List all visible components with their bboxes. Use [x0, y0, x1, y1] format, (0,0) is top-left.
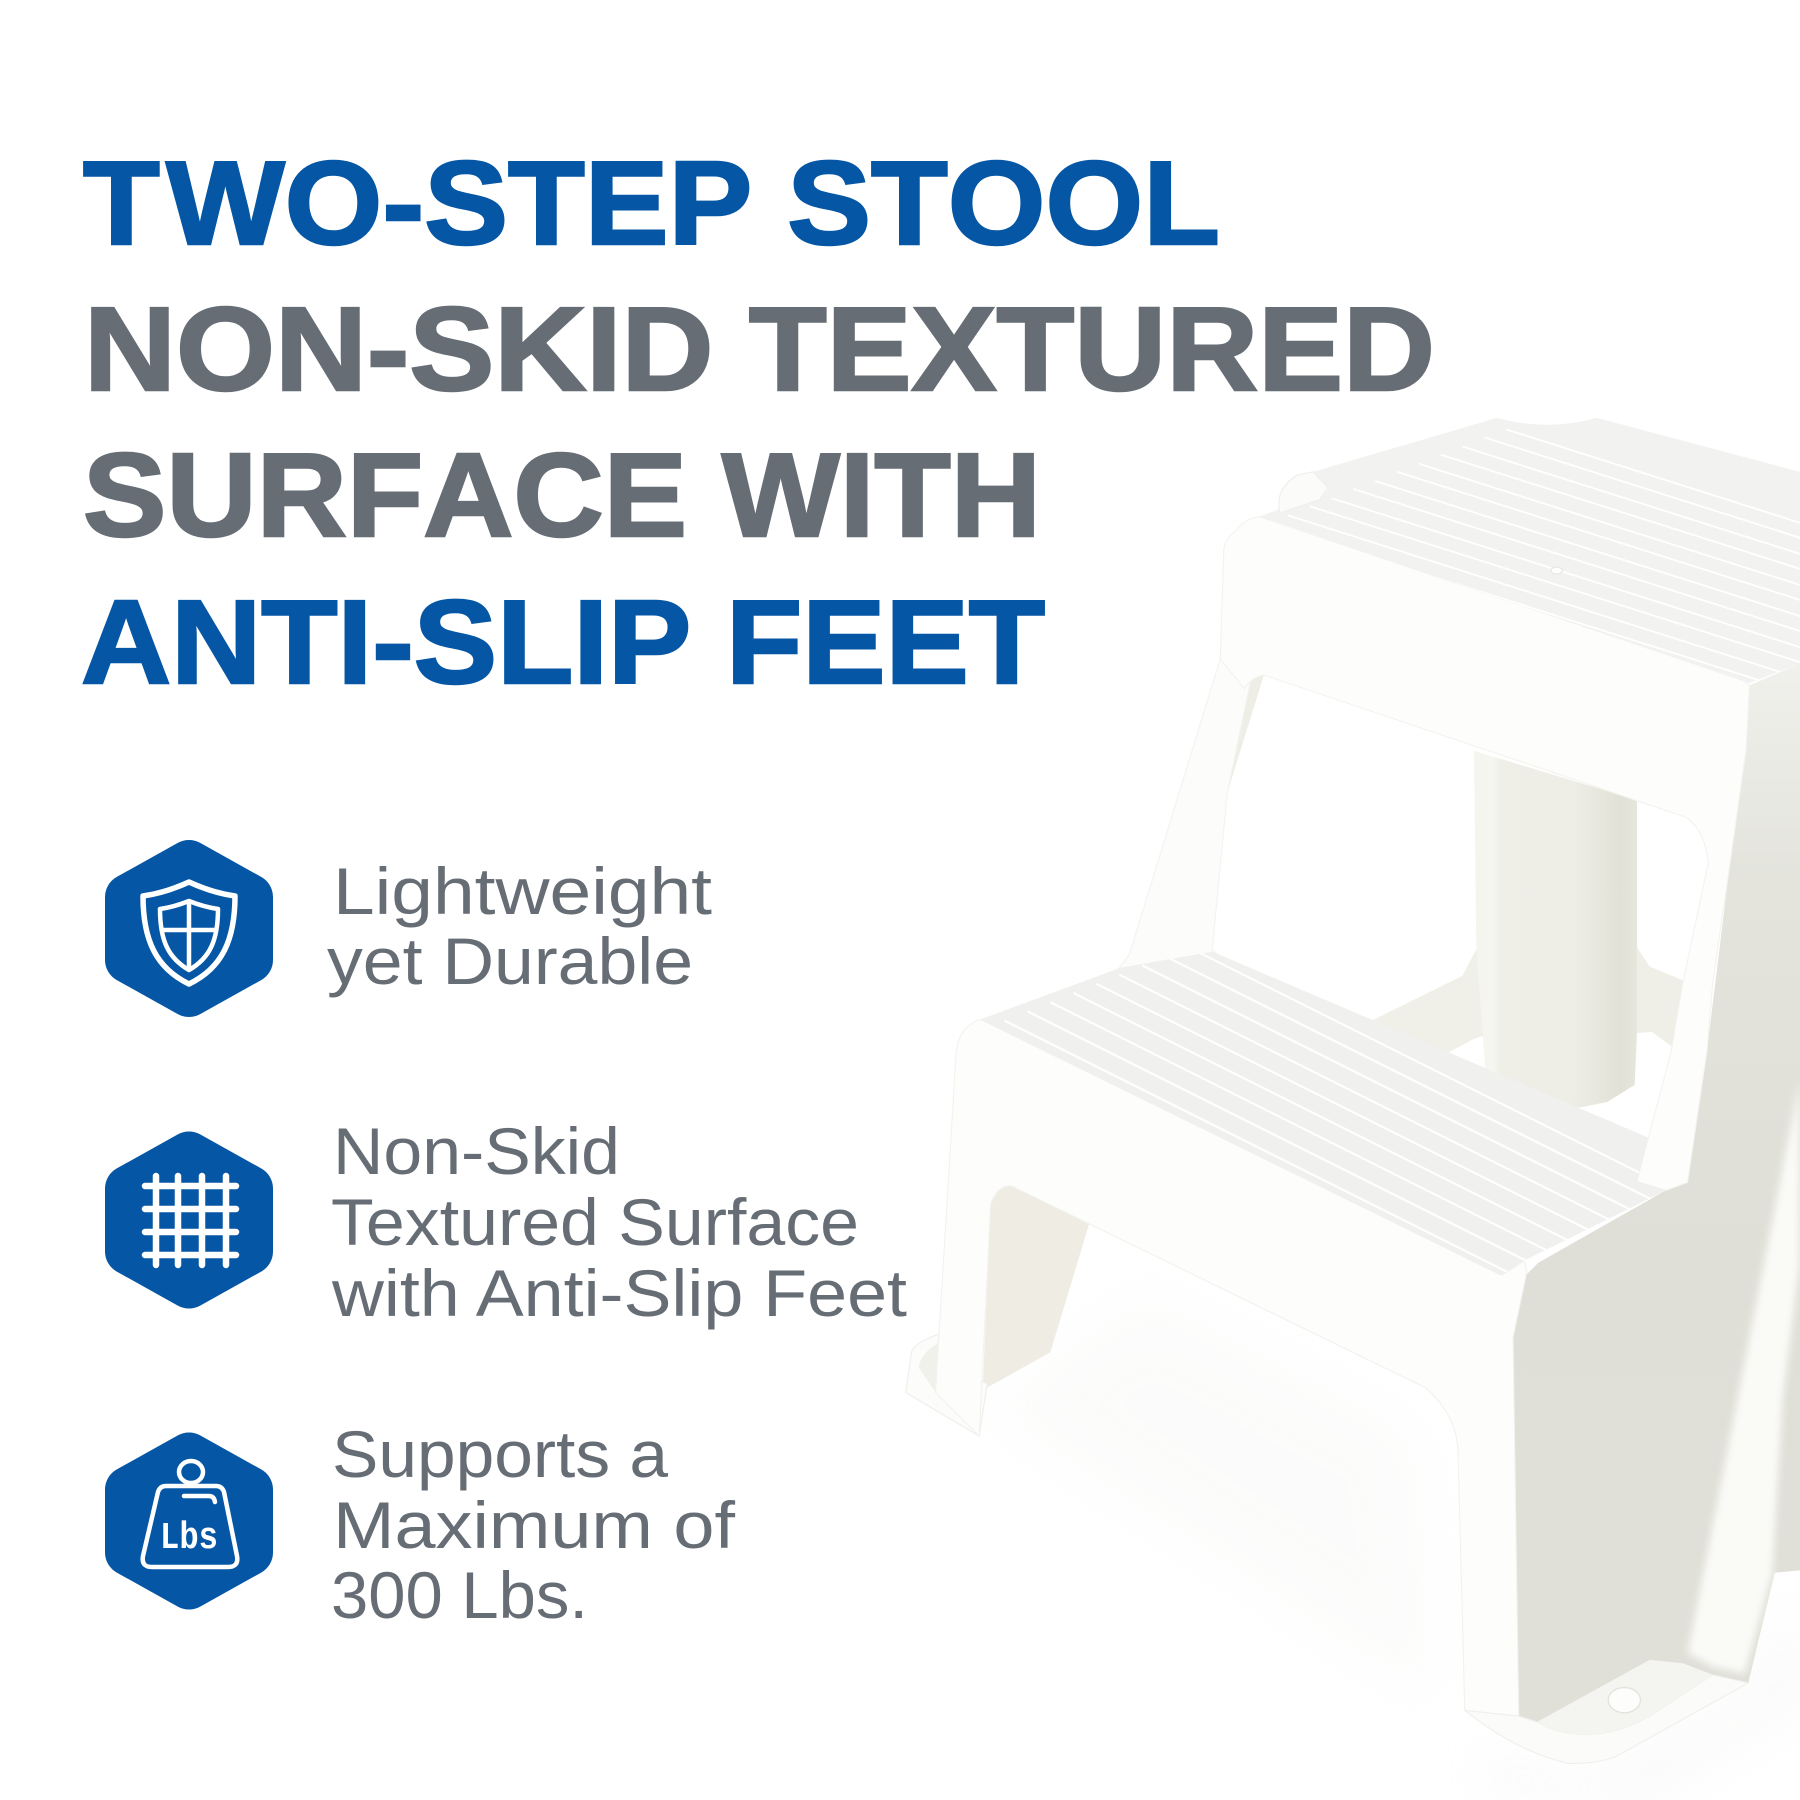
text: supports maximum 300 lbs: 300 Lbs.	[331, 1558, 588, 1632]
right foot tray	[1537, 1660, 1713, 1735]
upper tread bump	[1279, 472, 1328, 513]
foot peg	[1608, 1688, 1640, 1713]
title	[81, 137, 1435, 709]
text: non-skid textured surface: with Anti-Slip Feet	[331, 1256, 907, 1330]
inner arm sliver	[1227, 675, 1264, 793]
lower tread surface	[980, 952, 1666, 1275]
icon: textured grid badge	[128, 1154, 250, 1286]
text: supports maximum 300 lbs: Supports a	[332, 1417, 668, 1491]
text: non-skid textured surface: Textured Surface	[331, 1185, 859, 1259]
text: supports maximum 300 lbs	[331, 1417, 736, 1632]
upper front face and light strip	[1220, 517, 1749, 1190]
title line 3: SURFACE WITH	[83, 429, 1041, 562]
floor shadow	[987, 1297, 1800, 1800]
upper tread ribs	[1288, 428, 1800, 680]
right side panel	[1513, 664, 1800, 1722]
upper left arm	[1102, 659, 1251, 987]
text: non-skid textured surface	[331, 1114, 907, 1330]
left foot tray	[918, 1343, 938, 1392]
text: lightweight yet durable: yet Durable	[327, 924, 693, 998]
side ridge highlight	[1688, 1079, 1800, 1674]
rear post	[1474, 751, 1637, 1109]
text: non-skid textured surface: Non-Skid	[333, 1114, 620, 1188]
lower tread ribs	[1004, 954, 1650, 1272]
icon: weight badge: Lbs	[160, 1517, 218, 1560]
upper tread nub	[1551, 567, 1562, 574]
title line 2: NON-SKID TEXTURED	[84, 283, 1435, 416]
rear braces	[1367, 949, 1492, 1056]
title line 1: TWO-STEP STOOL	[83, 137, 1220, 270]
icon: weight badge	[128, 1456, 250, 1586]
upper tread surface	[1259, 418, 1800, 683]
title line 4: ANTI-SLIP FEET	[81, 576, 1045, 709]
stool product illustration	[906, 418, 1800, 1800]
lower front face and legs	[936, 1019, 1527, 1716]
text: supports maximum 300 lbs: Maximum of	[333, 1488, 736, 1562]
right foot rim	[1465, 1675, 1748, 1763]
text: lightweight yet durable	[327, 854, 712, 998]
left foot	[906, 1334, 987, 1436]
left leg inner face	[983, 1186, 1091, 1390]
text: lightweight yet durable: Lightweight	[333, 854, 712, 928]
icon: shield badge	[128, 863, 250, 994]
